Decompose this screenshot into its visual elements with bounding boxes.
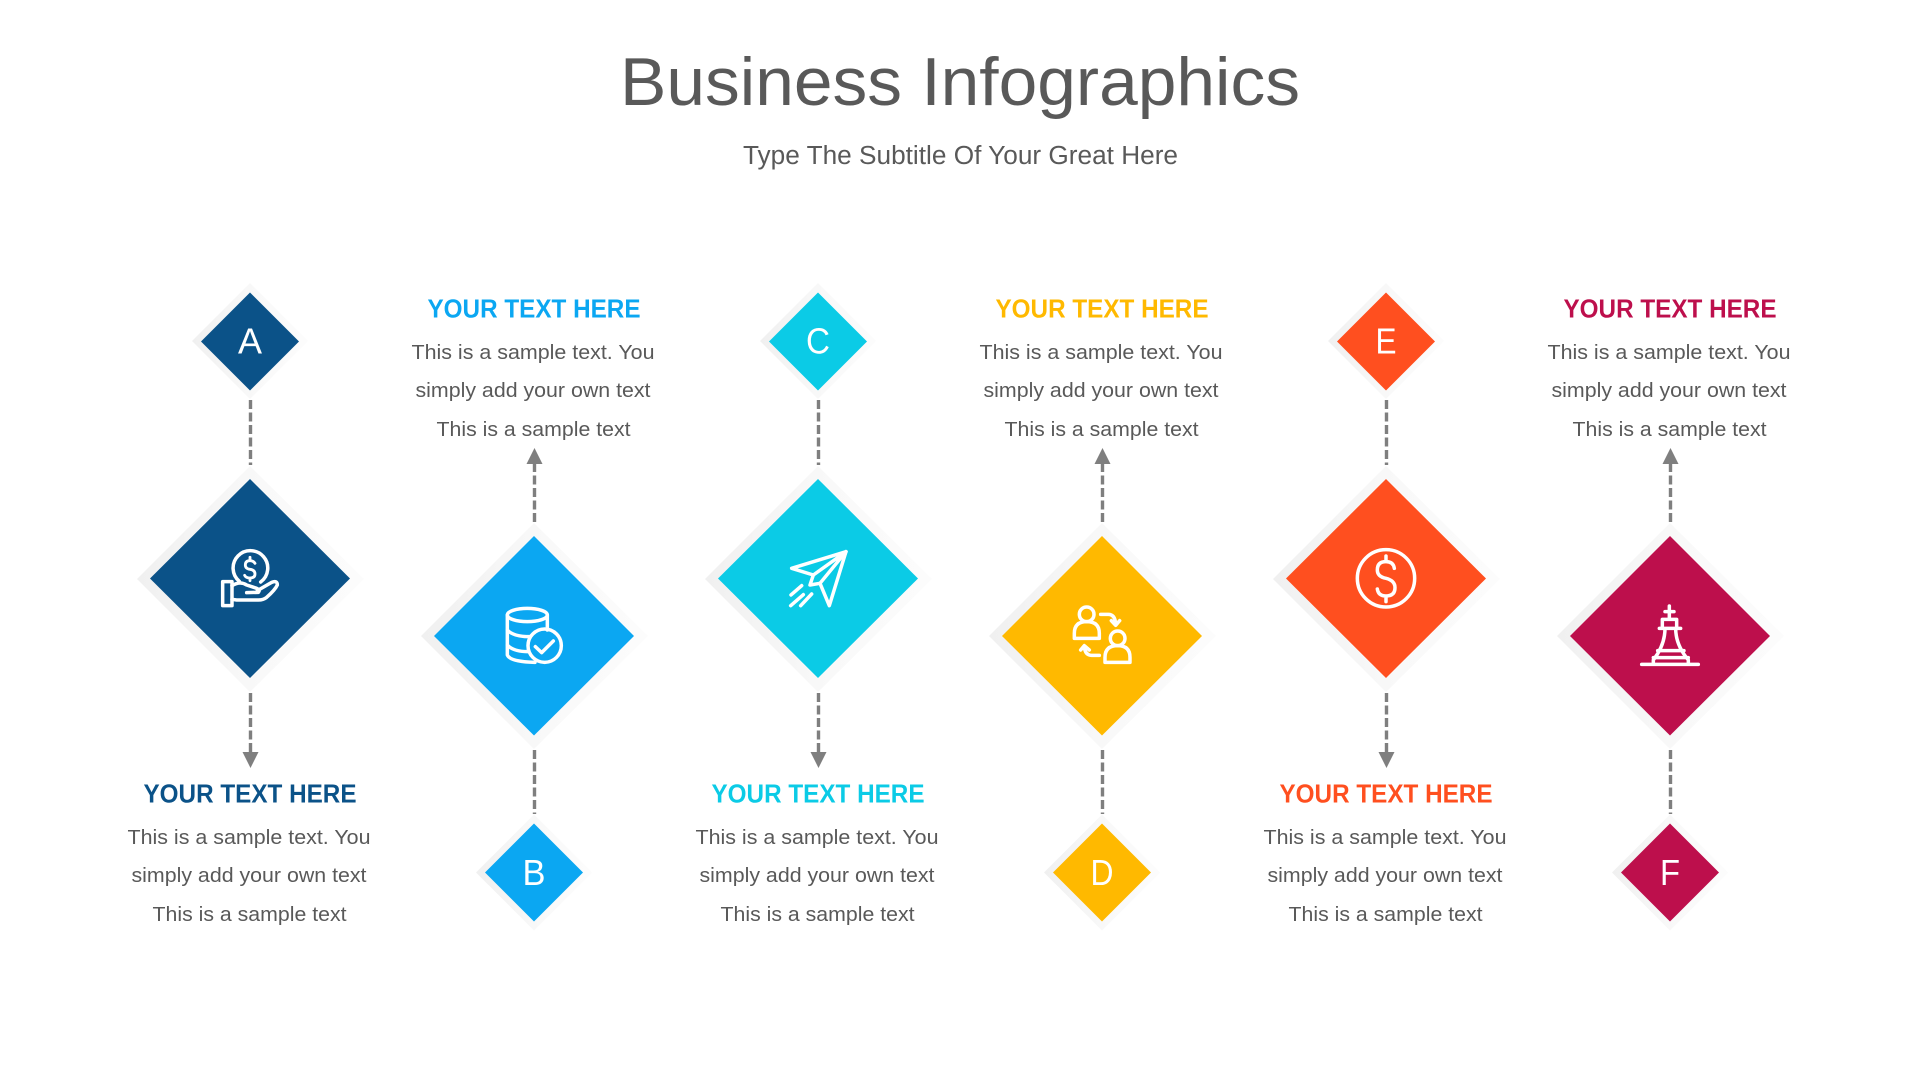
letter diamond E: E — [1376, 320, 1396, 362]
text block F: YOUR TEXT HERE — [1564, 294, 1776, 324]
text block E — [1264, 778, 1506, 926]
letter diamond F — [1612, 814, 1728, 930]
arrow down E — [1378, 693, 1394, 768]
large diamond F — [1557, 523, 1784, 749]
text block D: This is a sample text — [1004, 418, 1199, 441]
letter diamond D — [1044, 814, 1160, 930]
dashed connector B — [533, 750, 536, 814]
text block A: This is a sample text. You — [128, 826, 370, 849]
dashed connector E — [1385, 400, 1388, 465]
text block E: YOUR TEXT HERE — [1280, 778, 1492, 808]
text block B: YOUR TEXT HERE — [428, 294, 640, 324]
text block D: simply add your own text — [984, 379, 1219, 402]
dashed connector C — [817, 400, 820, 465]
arrow up F — [1662, 448, 1678, 522]
text block C: simply add your own text — [700, 864, 935, 887]
arrow up D — [1094, 448, 1110, 522]
large diamond E — [1273, 466, 1500, 692]
letter diamond F: F — [1660, 852, 1680, 893]
icon: chess king — [1642, 606, 1698, 664]
title: Business Infographics — [620, 44, 1300, 120]
text block D: This is a sample text. You — [980, 341, 1222, 364]
letter diamond E — [1328, 283, 1444, 399]
text block C: YOUR TEXT HERE — [712, 778, 924, 808]
panel: column E — [1264, 283, 1506, 926]
text block B — [412, 294, 654, 441]
arrow down C — [810, 693, 826, 768]
text block A — [128, 778, 370, 926]
panel: column C — [696, 283, 938, 926]
icon: hand holding coin — [223, 551, 277, 606]
text block F — [1548, 294, 1790, 441]
text block B: This is a sample text. You — [412, 341, 654, 364]
icon: dollar coin — [1357, 550, 1415, 607]
letter diamond A: A — [238, 320, 262, 362]
panel: column D — [980, 294, 1222, 930]
panel: column B — [412, 294, 654, 930]
text block D: YOUR TEXT HERE — [996, 294, 1208, 324]
text block A: This is a sample text — [152, 903, 347, 926]
text block D — [980, 294, 1222, 441]
text block F: This is a sample text — [1572, 418, 1767, 441]
letter diamond B: B — [522, 852, 546, 893]
icon: people exchange — [1074, 607, 1130, 662]
text block B: simply add your own text — [416, 379, 651, 402]
dashed connector F — [1669, 750, 1672, 814]
letter diamond C — [760, 283, 876, 399]
letter diamond A — [192, 283, 308, 399]
text block A: YOUR TEXT HERE — [144, 778, 356, 808]
text block A: simply add your own text — [132, 864, 367, 887]
dashed connector A — [249, 400, 252, 465]
letter diamond B — [476, 814, 592, 930]
text block F: simply add your own text — [1552, 379, 1787, 402]
text block E: simply add your own text — [1268, 864, 1503, 887]
arrow up B — [526, 448, 542, 522]
text block E: This is a sample text. You — [1264, 826, 1506, 849]
text block B: This is a sample text — [436, 418, 631, 441]
text block C — [696, 778, 938, 926]
icon: database check — [507, 608, 561, 662]
dashed connector D — [1101, 750, 1104, 814]
text block C: This is a sample text. You — [696, 826, 938, 849]
icon: paper plane — [791, 552, 846, 606]
large diamond D — [989, 523, 1216, 749]
panel: column A — [128, 283, 370, 926]
arrow down A — [242, 693, 258, 768]
large diamond C — [705, 466, 932, 692]
text block C: This is a sample text — [720, 903, 915, 926]
letter diamond D: D — [1090, 852, 1114, 893]
large diamond A — [137, 466, 364, 692]
text block F: This is a sample text. You — [1548, 341, 1790, 364]
subtitle: Type The Subtitle Of Your Great Here — [743, 142, 1178, 170]
large diamond B — [421, 523, 648, 749]
text block E: This is a sample text — [1288, 903, 1483, 926]
panel: column F — [1548, 294, 1790, 930]
letter diamond C: C — [806, 320, 830, 362]
